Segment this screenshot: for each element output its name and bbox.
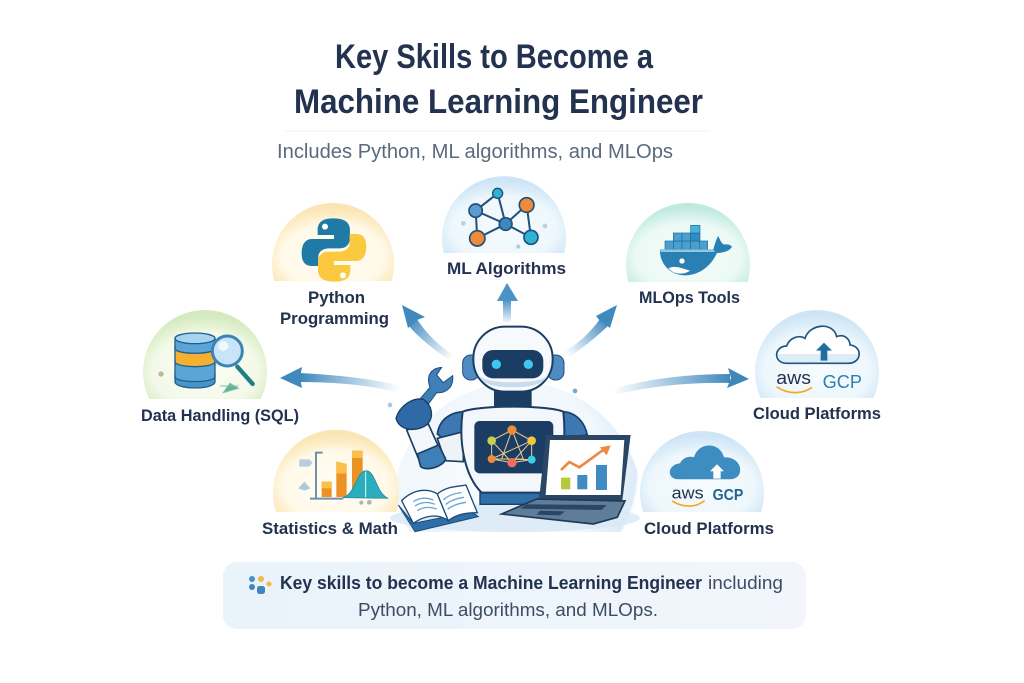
icon: solid cloud with upload arrow: GCP bbox=[713, 487, 743, 504]
robot hand bbox=[396, 399, 431, 429]
central robot illustration bbox=[388, 327, 631, 532]
icon: container whale bbox=[660, 225, 732, 275]
arrow to ML Algorithms bbox=[497, 283, 518, 322]
panel: Python Programming: Python bbox=[308, 289, 365, 307]
icon: outlined cloud with upload arrow: GCP bbox=[823, 371, 862, 392]
panel: ML Algorithms: ML Algorithms bbox=[447, 260, 566, 278]
arrow to MLOps Tools bbox=[565, 305, 617, 357]
laptop bbox=[502, 435, 631, 524]
robot head bbox=[473, 327, 553, 392]
arrow to Data Handling bbox=[280, 367, 400, 393]
arrow to Cloud Platforms bbox=[613, 368, 749, 395]
panel: Statistics and Math bbox=[262, 430, 399, 538]
icon: solid cloud with upload arrow: aws bbox=[672, 484, 704, 503]
bottom callout: Key skills to become a Machine Learning Engineer bbox=[280, 573, 702, 593]
robot base bbox=[480, 492, 540, 504]
robot left shoulder bbox=[437, 412, 465, 443]
title: Machine Learning Engineer bbox=[294, 83, 703, 121]
panel: Cloud Platforms (upper) bbox=[753, 310, 881, 423]
icon: neural network graph bbox=[461, 188, 547, 249]
robot right shoulder bbox=[562, 412, 587, 438]
icon: bar chart with bell curve bbox=[298, 451, 388, 505]
icon: outlined cloud with upload arrow bbox=[776, 326, 862, 393]
panel: Python Programming bbox=[272, 203, 394, 328]
robot torso bbox=[461, 407, 564, 493]
icon: solid cloud with upload arrow bbox=[670, 446, 743, 506]
robot arm bbox=[407, 424, 463, 469]
central robot backdrop bbox=[378, 344, 642, 532]
bottom callout bbox=[223, 562, 806, 629]
panel: Statistics and Math: Statistics & Math bbox=[262, 520, 398, 538]
chest screen with network bbox=[474, 421, 553, 473]
panel: MLOps Tools bbox=[626, 203, 750, 307]
panel: Data Handling: Data Handling (SQL) bbox=[141, 407, 299, 425]
panel: Cloud Platforms (upper): Cloud Platforms bbox=[753, 405, 881, 423]
arrow to Python Programming bbox=[402, 305, 453, 360]
panel: MLOps Tools: MLOps Tools bbox=[639, 289, 740, 307]
title: Key Skills to Become a bbox=[335, 38, 654, 76]
icon: colored dots bbox=[249, 576, 272, 594]
panel: Python Programming: Programming bbox=[280, 310, 389, 328]
open book bbox=[398, 485, 478, 532]
panel: Cloud Platforms (lower): Cloud Platforms bbox=[644, 520, 774, 538]
panel: Data Handling bbox=[141, 310, 299, 425]
icon: outlined cloud with upload arrow: aws bbox=[776, 367, 811, 388]
icon: python logo bbox=[302, 218, 366, 282]
bottom callout: Python, ML algorithms, and MLOps. bbox=[358, 600, 658, 620]
icon: database with magnifier bbox=[158, 333, 253, 393]
bottom callout: including bbox=[708, 573, 783, 593]
title bbox=[294, 38, 703, 121]
subtitle: Includes Python, ML algorithms, and MLOps bbox=[277, 141, 673, 163]
panel: Cloud Platforms (lower) bbox=[640, 431, 774, 538]
robot ears bbox=[463, 355, 564, 380]
wrench bbox=[413, 367, 453, 413]
robot neck bbox=[494, 388, 532, 408]
panel: ML Algorithms bbox=[442, 176, 566, 278]
